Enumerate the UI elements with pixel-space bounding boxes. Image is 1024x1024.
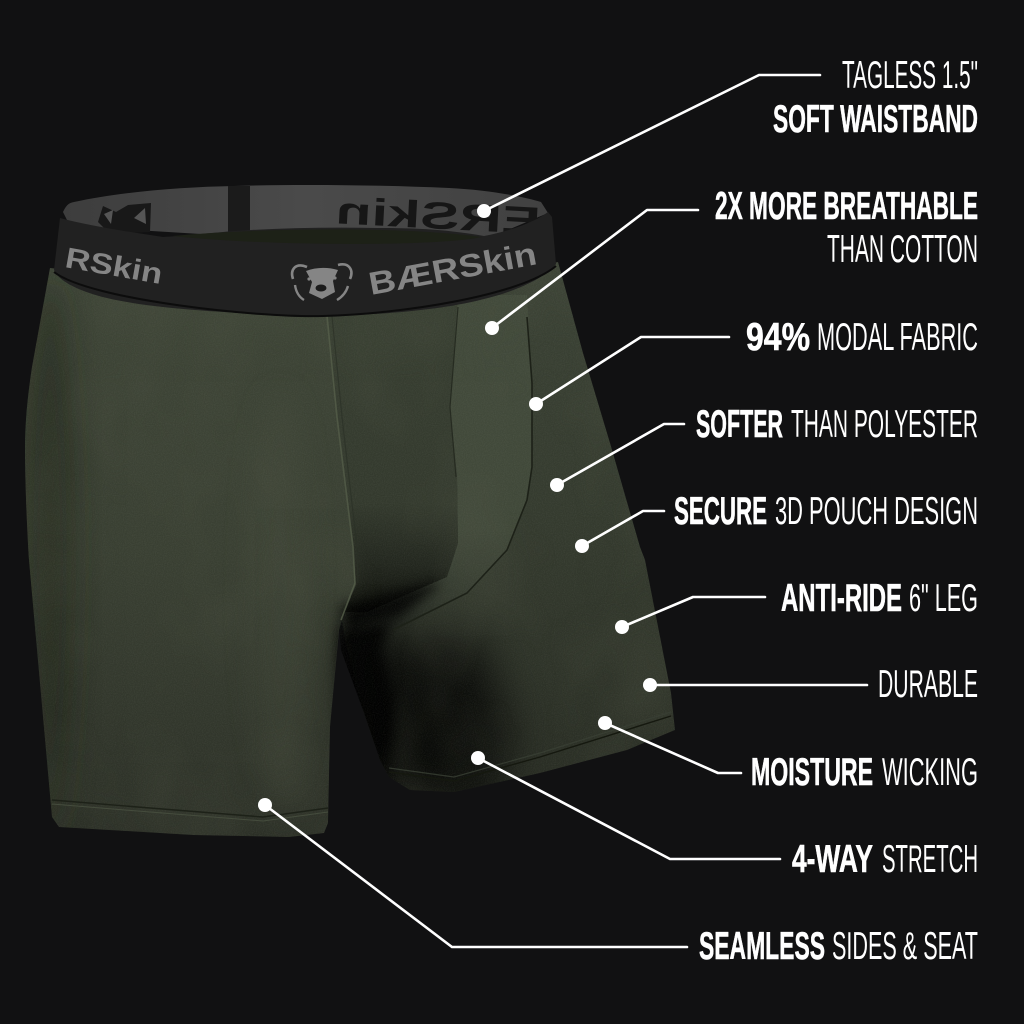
center seam [327,316,355,620]
callout: stretch: 4-WAY [792,838,873,881]
callout: softer [550,403,978,492]
callout: moisture: MOISTURE [751,751,873,794]
callout: modal fabric: 94% [746,316,810,359]
callout: pouch [575,490,978,553]
right hem seam [389,712,671,777]
callout: breathable [485,185,978,335]
panel: right leg [339,262,675,792]
callout: stretch [471,751,978,881]
callout: seamless [258,798,978,968]
callout: anti-ride: ANTI-RIDE [781,577,902,620]
panel: left leg [25,268,356,837]
callout: moisture [598,716,978,794]
waistband back inner [63,185,548,240]
callout: durable [643,663,978,706]
callout: anti-ride [615,577,978,634]
logo: bear [292,264,351,300]
callout: modal fabric [529,316,978,411]
shading [20,260,680,840]
band lower edge [54,266,556,316]
left hem seam [52,800,328,817]
callout: pouch: SECURE [674,490,767,533]
inner olive lining [172,229,482,244]
panel: pouch [367,295,532,630]
mirrored inner logo: ERSkin [335,190,542,243]
callout: waistband [477,54,978,218]
panel: fly front [327,300,458,612]
waistband front [54,212,556,316]
logo: front wordmark: BÆRSkin [366,236,539,302]
callout: softer: SOFTER [696,403,783,446]
callout: seamless: SEAMLESS [699,925,825,968]
mirrored inner logo [98,190,542,243]
pouch seam [393,317,532,630]
seams [52,307,671,821]
garment: boxer briefs [20,185,680,840]
logo: left wordmark: RSkin [63,242,165,291]
inner tag strip [228,186,250,232]
